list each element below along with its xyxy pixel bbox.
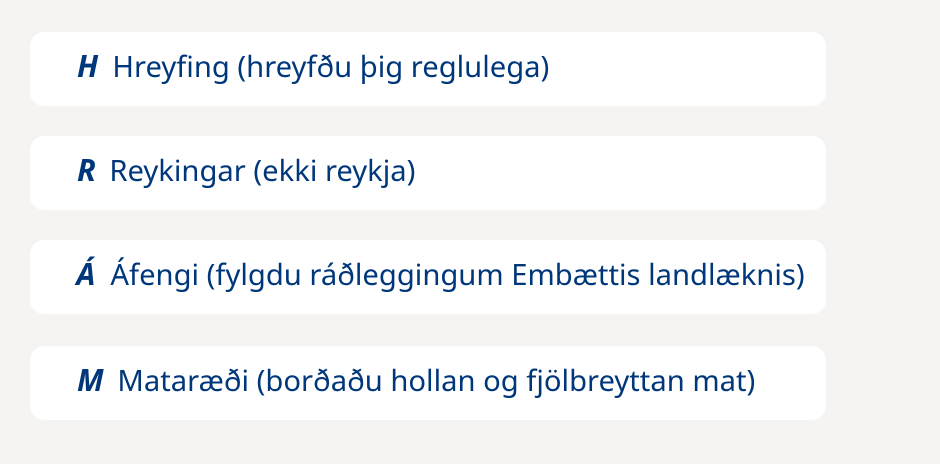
panel: H row	[30, 32, 826, 106]
panel: R row	[30, 136, 826, 210]
text: Áfengi: Áfengi (fylgdu ráðleggingum Embættis landlæknis)	[110, 254, 805, 294]
text: Mataræði: Mataræði (borðaðu hollan og fjölbreyttan mat)	[117, 360, 755, 400]
text: Reykingar: Reykingar (ekki reykja)	[109, 150, 415, 190]
letter Á: Á	[76, 253, 95, 294]
letter R: R	[77, 149, 96, 190]
panel: M row	[30, 346, 826, 420]
letter M: M	[77, 359, 104, 400]
text: Hreyfing: Hreyfing (hreyfðu þig reglulega)	[112, 46, 549, 86]
letter H: H	[77, 45, 98, 86]
panel: Á row	[30, 240, 826, 314]
